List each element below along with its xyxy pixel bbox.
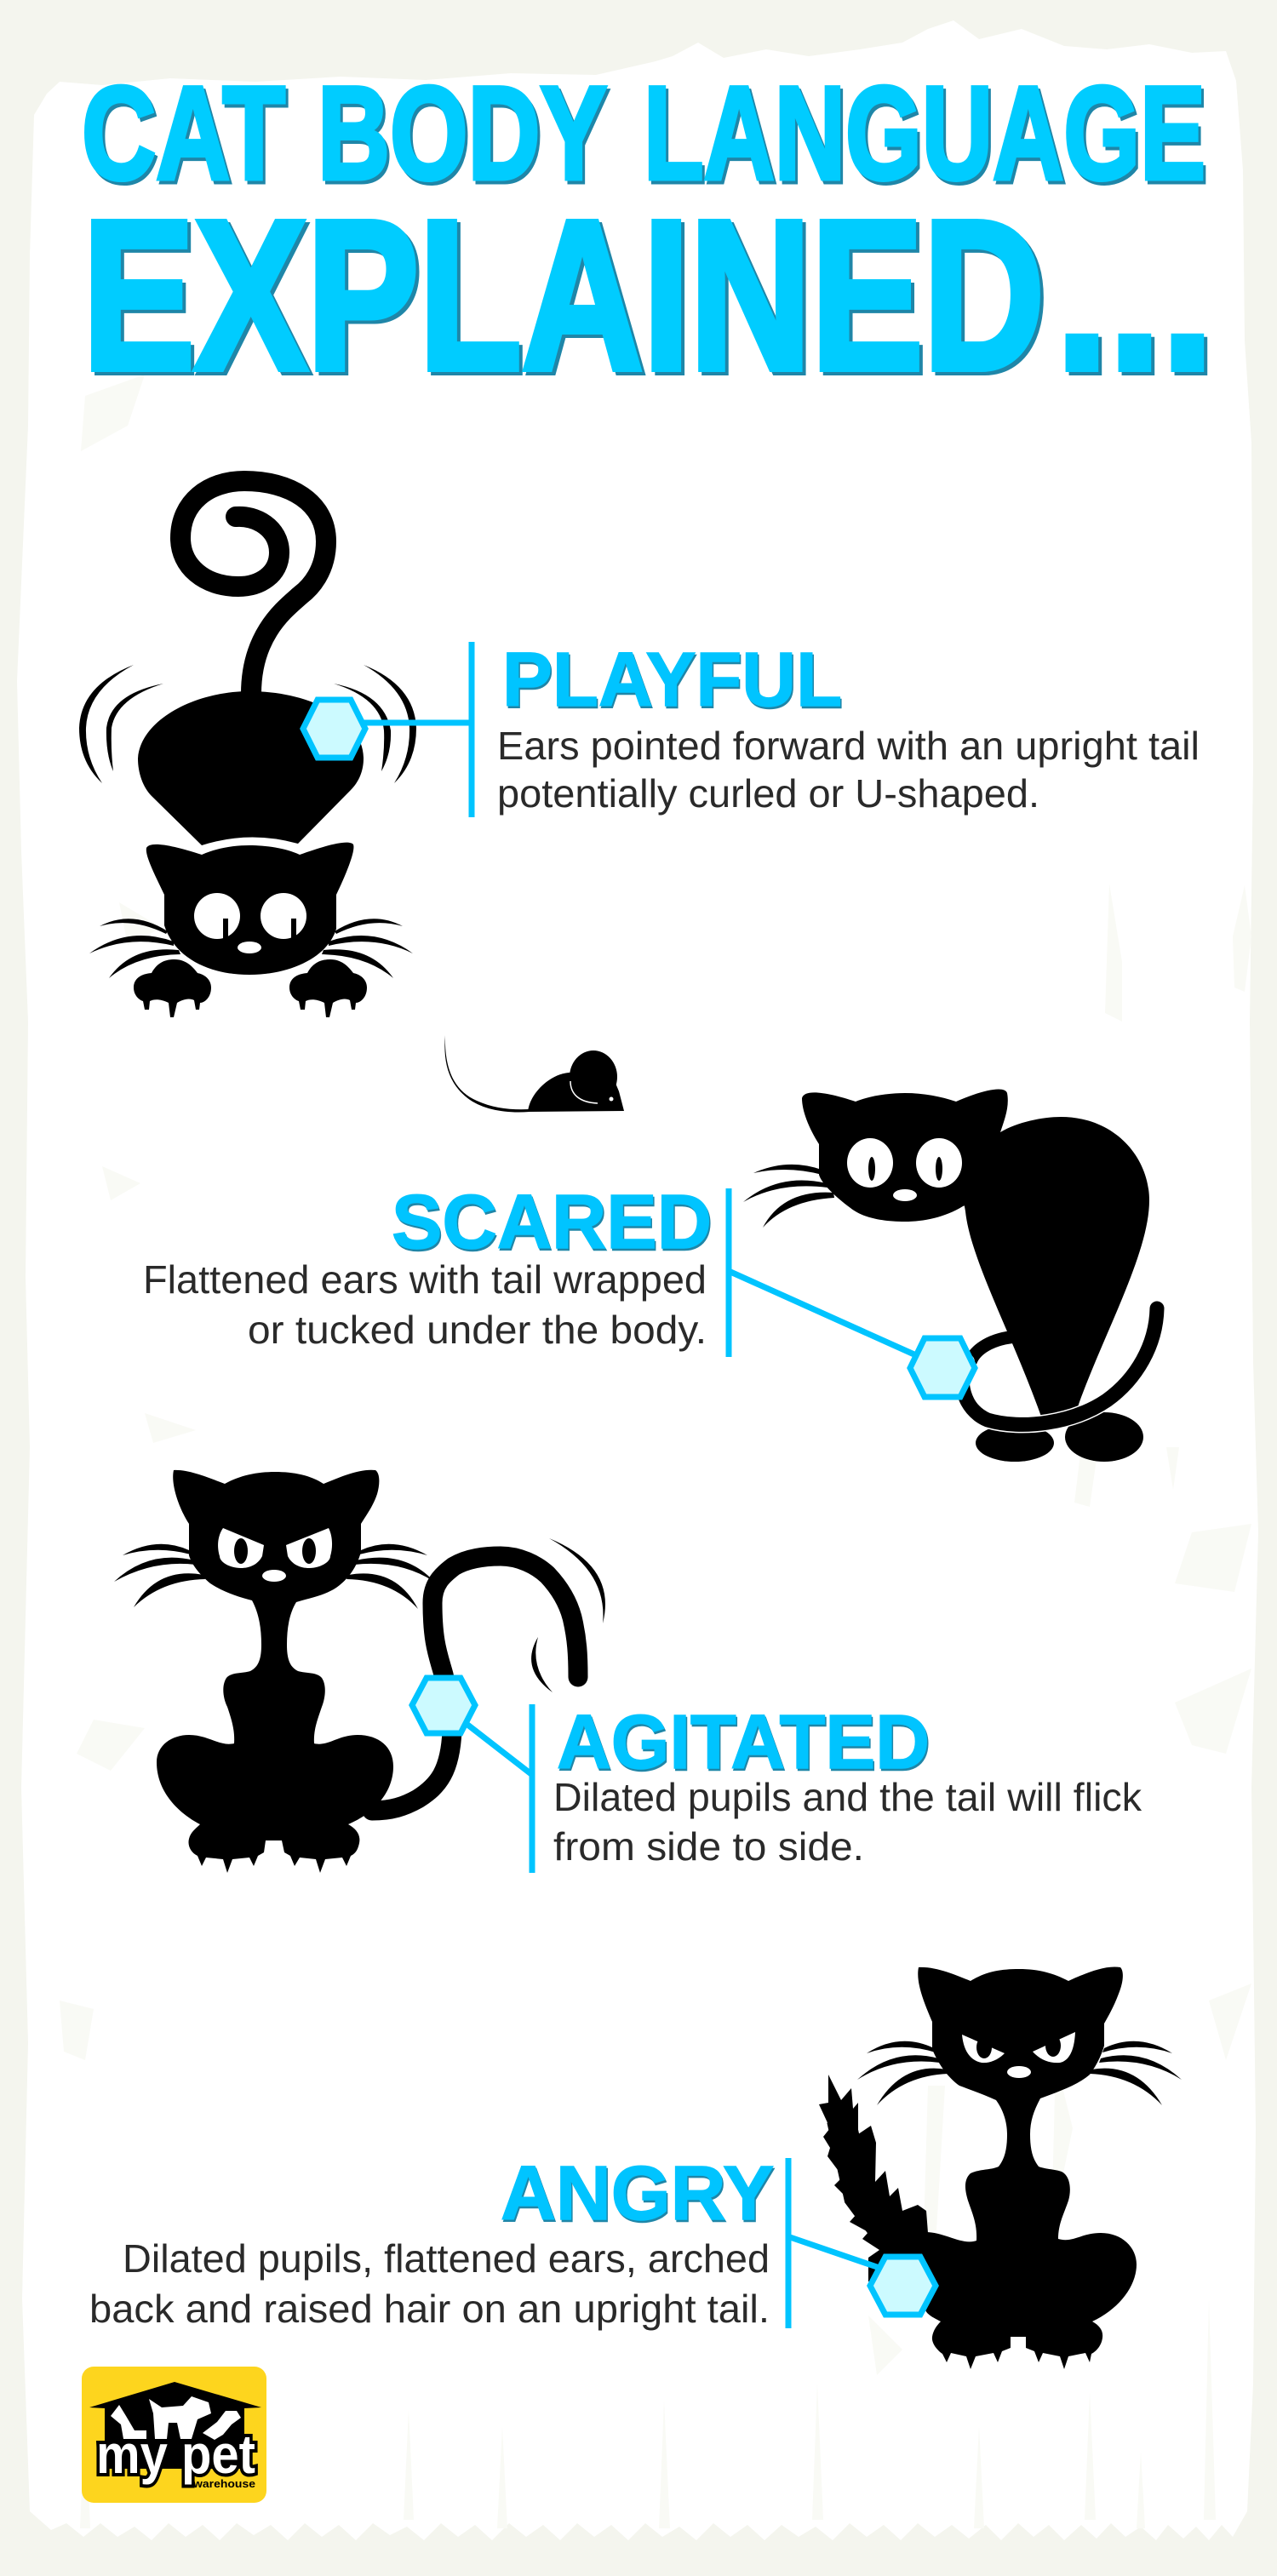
cat tail	[372, 1556, 578, 1811]
text: angry description: Dilated pupils, flattened ears, arched	[123, 2236, 770, 2281]
text: agitated description: Dilated pupils and the tail will flick	[553, 1775, 1142, 1819]
cat tail	[962, 1308, 1157, 1424]
motion arcs	[79, 665, 416, 783]
icon: mouse	[444, 1035, 624, 1112]
cat paws	[976, 1412, 1143, 1462]
callout connector	[467, 1704, 532, 1873]
icon: scared cat	[743, 1089, 1157, 1462]
text: agitated description	[553, 1775, 1142, 1869]
heading: agitated: AGITATED	[557, 1700, 930, 1785]
text: playful description: potentially curled or U-shaped.	[497, 771, 1039, 816]
callout connector	[362, 642, 473, 817]
cat eyes	[962, 2032, 1075, 2078]
callout connector	[729, 1188, 916, 1357]
title line 2: EXPLAINED	[83, 176, 1045, 414]
text: scared description: or tucked under the body.	[248, 1308, 707, 1352]
logo house	[89, 2382, 261, 2469]
icon: angry cat	[819, 1966, 1182, 2369]
title line 2: ...	[1056, 176, 1214, 414]
logo pets	[111, 2396, 241, 2440]
logo wordmark: my pet	[96, 2424, 255, 2485]
cat paws	[134, 959, 367, 1017]
cat eyes	[218, 1528, 332, 1582]
title line 1: CAT	[82, 60, 285, 208]
title	[82, 60, 1217, 417]
cat eyes	[194, 893, 306, 953]
text: scared description: Flattened ears with tail wrapped	[143, 1257, 707, 1302]
cat head	[802, 1089, 1008, 1222]
title line 1	[82, 60, 1208, 211]
callout connector	[788, 2158, 879, 2328]
heading: playful: PLAYFUL	[504, 640, 843, 725]
heading: scared: SCARED	[393, 1182, 713, 1267]
panel: playful	[79, 481, 1200, 1017]
text: playful description: Ears pointed forward with an upright tail	[497, 724, 1200, 768]
cat whiskers	[114, 1544, 434, 1609]
cat tail curled	[180, 481, 326, 694]
cat whiskers	[89, 919, 413, 978]
heading: playful: PLAYFUL	[502, 638, 842, 723]
heading: agitated: AGITATED	[558, 1703, 931, 1788]
panel: agitated	[114, 1470, 1142, 1873]
title line 2: EXPLAINED	[86, 180, 1048, 417]
heading: angry: ANGRY	[502, 2154, 775, 2239]
background: faint grunge streaks	[60, 375, 1251, 2528]
cat body and head	[157, 1470, 393, 1873]
heading: scared: SCARED	[392, 1180, 712, 1265]
cat eyes	[847, 1138, 962, 1201]
marker hexagon	[303, 700, 365, 758]
marker hexagon	[412, 1678, 475, 1733]
title line 1: BODY	[320, 63, 610, 211]
text: angry description	[89, 2236, 770, 2331]
icon: playful cat	[79, 481, 416, 1017]
cat body	[962, 1117, 1149, 1417]
cat tail bristled	[819, 2075, 931, 2281]
panel: angry	[89, 1966, 1182, 2369]
text: playful description	[497, 724, 1200, 816]
cat body and head	[918, 1966, 1137, 2369]
title line 2: ...	[1059, 180, 1217, 417]
cat whiskers	[743, 1165, 834, 1228]
logo small text: warehouse	[192, 2477, 255, 2490]
marker hexagon	[870, 2257, 936, 2315]
icon: agitated cat	[114, 1470, 605, 1873]
title line 1: CAT	[84, 63, 288, 211]
title line 1: BODY	[318, 60, 607, 208]
heading: angry: ANGRY	[501, 2151, 774, 2236]
logo: my pet warehouse	[82, 2367, 266, 2503]
cat head	[146, 843, 353, 975]
text: angry description: back and raised hair on an upright tail.	[89, 2287, 770, 2331]
cat whiskers	[857, 2041, 1182, 2105]
panel: scared	[143, 1035, 1157, 1462]
tail behind body	[971, 1337, 1017, 1362]
motion arcs	[531, 1538, 605, 1692]
cat body	[138, 691, 364, 845]
text: agitated description: from side to side.	[553, 1824, 864, 1869]
marker hexagon	[910, 1338, 975, 1397]
text: scared description	[143, 1257, 707, 1352]
